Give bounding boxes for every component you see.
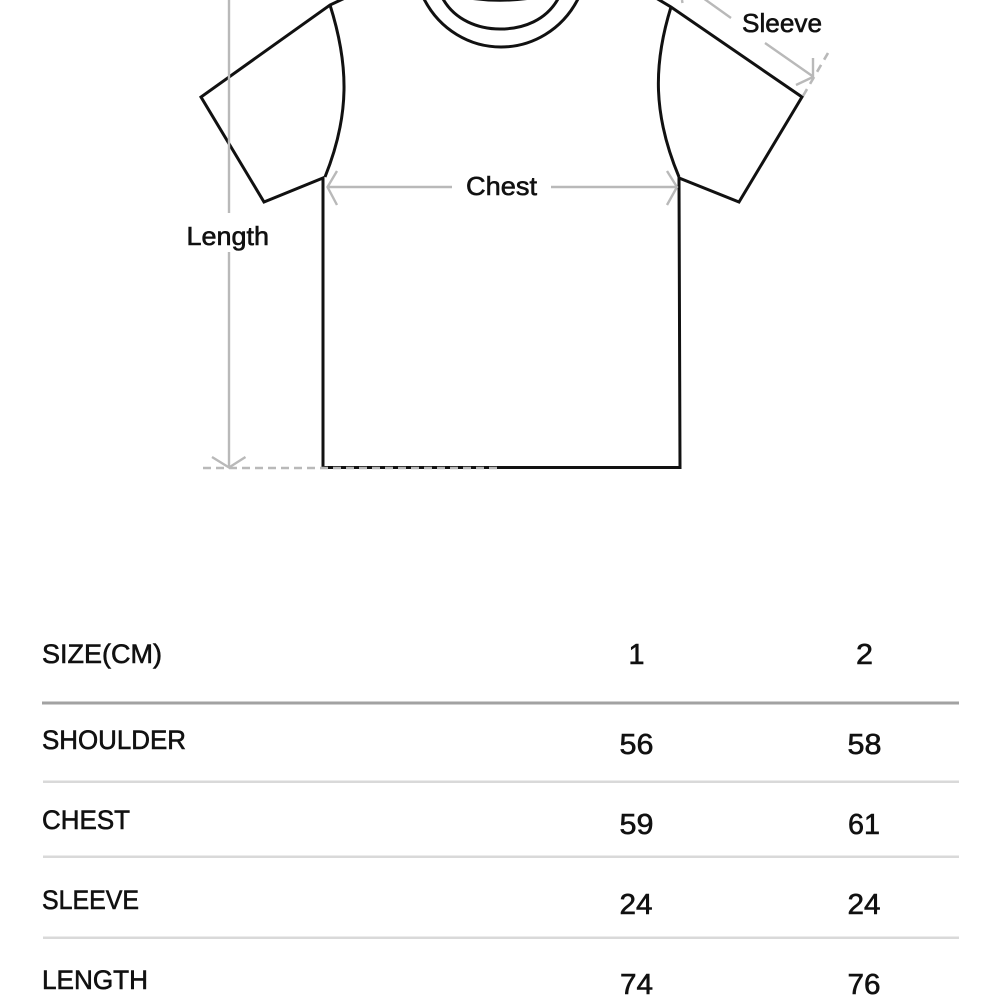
table row: length (42, 965, 880, 1000)
table header row: 1 (628, 639, 644, 671)
table row: chest (42, 805, 959, 858)
chest measurement arrow (328, 171, 677, 205)
table row: sleeve: 24 (620, 889, 652, 921)
table row: chest: 61 (848, 809, 880, 841)
table row: chest: CHEST (42, 805, 130, 835)
table row: shoulder: 58 (848, 729, 882, 761)
table row: shoulder (42, 725, 959, 783)
size table (42, 639, 959, 1000)
table row: shoulder: SHOULDER (42, 725, 186, 755)
sleeve measurement arrow (682, 0, 828, 96)
table header row (42, 639, 959, 704)
table row: shoulder: 56 (620, 729, 654, 761)
table row: length: LENGTH (42, 965, 148, 995)
table row: sleeve: SLEEVE (42, 885, 139, 915)
label: length: Length (186, 221, 269, 251)
label: chest: Chest (466, 171, 538, 201)
table row: sleeve: 24 (848, 889, 880, 921)
table header row: SIZE(CM) (42, 639, 162, 669)
garment outline (201, 0, 802, 468)
table row: sleeve (42, 885, 959, 939)
label: sleeve: Sleeve (742, 8, 822, 38)
t-shirt diagram (186, 0, 828, 468)
table row: chest: 59 (620, 809, 654, 841)
length measurement arrow (203, 0, 500, 468)
table header row: 2 (856, 639, 873, 671)
